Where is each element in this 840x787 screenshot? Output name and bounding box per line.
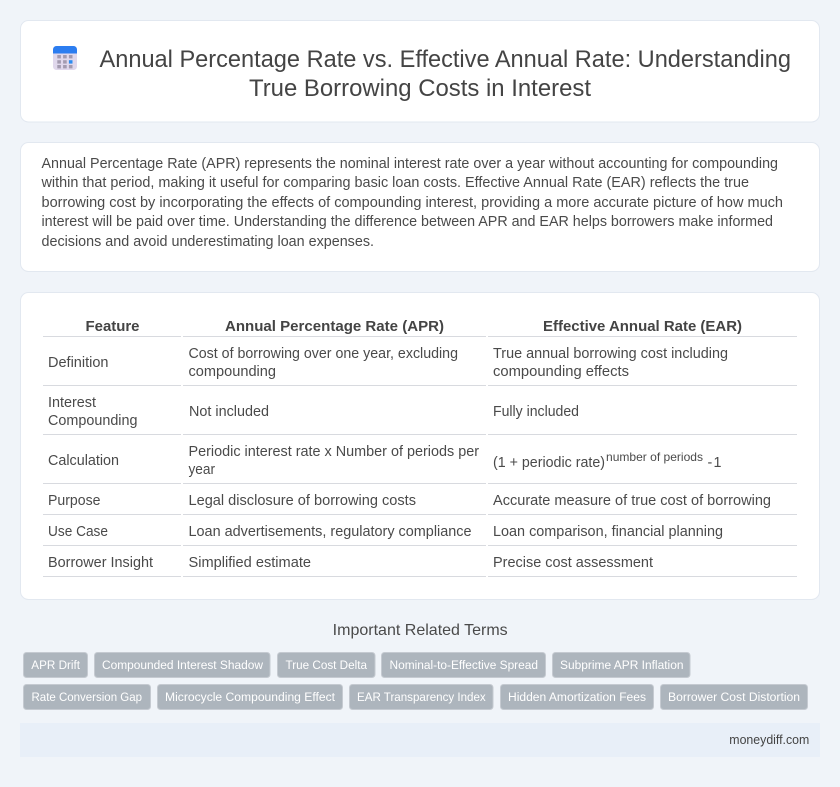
tag: EAR Transparency Index: EAR Transparency Index — [357, 690, 486, 704]
table row: purpose: Legal disclosure of borrowing costs — [188, 493, 416, 509]
table row: borrower insight: Simplified estimate — [188, 555, 311, 571]
tag: Nominal-to-Effective Spread: Nominal-to-Effective Spread — [390, 658, 538, 672]
tag: True Cost Delta: True Cost Delta — [286, 658, 367, 672]
table row: calculation: number of periods — [606, 450, 703, 464]
table row: use case: Loan advertisements, regulatory compliance — [188, 524, 472, 540]
tag: Subprime APR Inflation — [552, 652, 690, 678]
panel: comparison table — [20, 292, 820, 600]
tag: EAR Transparency Index — [350, 684, 493, 710]
footer: moneydiff.com — [729, 733, 809, 747]
table row: definition — [43, 346, 797, 386]
tag: Borrower Cost Distortion: Borrower Cost Distortion — [668, 690, 800, 704]
title: True Borrowing Costs in Interest — [249, 75, 591, 102]
panel: introduction — [20, 142, 820, 272]
tag: Borrower Cost Distortion — [660, 684, 808, 710]
title: Annual Percentage Rate vs. Effective Annual Rate: Understanding — [100, 46, 791, 73]
text block: introduction paragraph: decisions and avoid underestimating loan expenses. — [42, 234, 374, 250]
table row: interest compounding: Compounding — [48, 413, 138, 429]
table header row: Annual Percentage Rate (APR) — [225, 318, 444, 335]
table row: definition: compounding effects — [493, 364, 629, 380]
table row: interest compounding — [43, 395, 797, 435]
tag: Rate Conversion Gap — [24, 684, 150, 710]
footer — [20, 723, 820, 757]
table row: purpose: Purpose — [48, 493, 101, 509]
table row: definition: Cost of borrowing over one year, excluding — [188, 346, 458, 362]
table row: use case: Loan comparison, financial planning — [493, 524, 723, 540]
text block: introduction paragraph: interest will be paid over time. Understanding the difference between APR and EAR helps borrowers make informed — [42, 214, 773, 230]
table header row: Effective Annual Rate (EAR) — [543, 318, 742, 335]
table header row — [43, 318, 797, 337]
table row: borrower insight: Precise cost assessment — [493, 555, 653, 571]
table row: calculation: - — [708, 455, 712, 471]
table row: interest compounding: Interest — [48, 395, 96, 411]
table row: calculation: 1 — [714, 455, 722, 471]
tag: Microcycle Compounding Effect — [158, 684, 342, 710]
table row: borrower insight: Borrower Insight — [48, 555, 153, 571]
tag: Hidden Amortization Fees: Hidden Amortization Fees — [508, 690, 646, 704]
table row: purpose: Accurate measure of true cost of borrowing — [493, 493, 771, 509]
table row: calculation: (1 + periodic rate) — [493, 455, 605, 471]
table row: calculation: Calculation — [48, 453, 119, 469]
tag: Subprime APR Inflation: Subprime APR Inflation — [560, 658, 684, 672]
text block: introduction paragraph: Annual Percentage Rate (APR) represents the nominal interest rate over a year without accounting for compounding — [42, 156, 778, 172]
tag: Compounded Interest Shadow: Compounded Interest Shadow — [102, 658, 263, 672]
table row: use case: Use Case — [48, 524, 108, 540]
tag: Microcycle Compounding Effect: Microcycle Compounding Effect — [165, 690, 336, 704]
table row: use case — [43, 524, 797, 546]
tag: Rate Conversion Gap: Rate Conversion Gap — [32, 690, 142, 704]
text block: introduction paragraph: within that period, making it useful for comparing basic loan costs. Effective Annual Rate (EAR) reflects the true — [40, 175, 749, 191]
table row: definition: True annual borrowing cost including — [493, 346, 728, 362]
table row: borrower insight — [43, 555, 797, 577]
icon: calendar — [53, 46, 77, 70]
tag: APR Drift — [24, 652, 88, 678]
panel: header — [20, 20, 820, 122]
tag: APR Drift: APR Drift — [31, 658, 81, 672]
table row: calculation: year — [188, 462, 215, 478]
tag group: related terms — [24, 652, 808, 710]
tag: Hidden Amortization Fees — [500, 684, 654, 710]
tag: Nominal-to-Effective Spread — [382, 652, 546, 678]
table row: calculation: Periodic interest rate x Number of periods per — [188, 444, 479, 460]
text block: introduction paragraph — [40, 156, 783, 250]
heading: important related terms: Important Related Terms — [333, 622, 508, 639]
title — [100, 46, 791, 102]
tag: Compounded Interest Shadow — [94, 652, 270, 678]
text block: introduction paragraph: borrowing cost by incorporating the effects of compounding interest, providing a more accurate picture of how much — [42, 195, 783, 211]
table row: definition: compounding — [188, 364, 276, 380]
table row: interest compounding: Fully included — [493, 404, 579, 420]
table row: definition: Definition — [48, 355, 109, 371]
table row: interest compounding: Not included — [189, 404, 269, 420]
table row: purpose — [43, 493, 797, 515]
table header row: Feature — [86, 318, 140, 335]
tag: True Cost Delta — [278, 652, 375, 678]
table row: calculation — [43, 444, 797, 484]
